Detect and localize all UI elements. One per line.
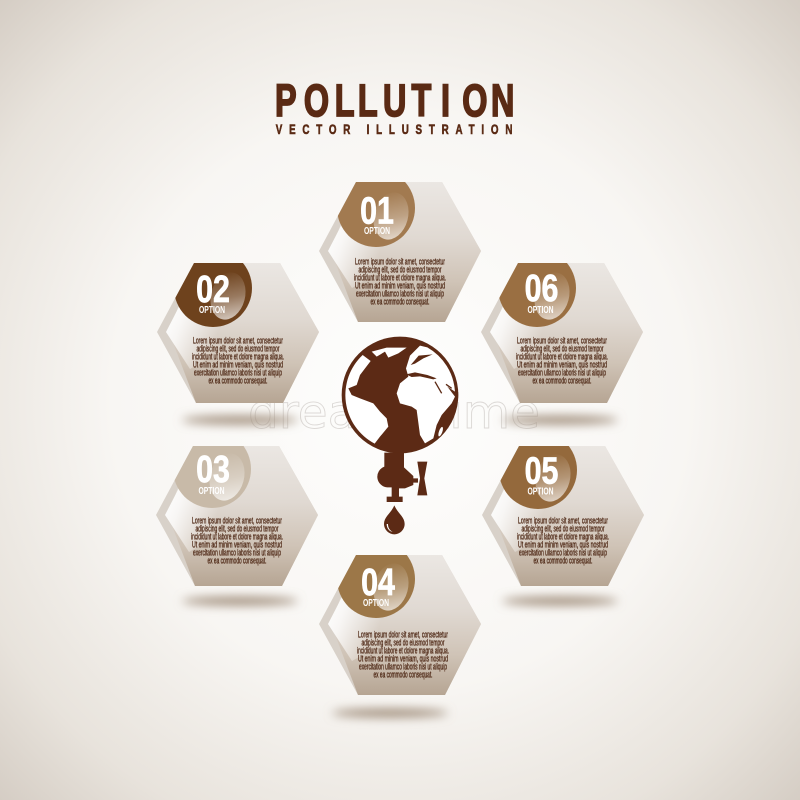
body text: incididunt ut labore et dolore magna aliqua. bbox=[516, 352, 608, 362]
water drop bbox=[384, 505, 405, 534]
body text: incididunt ut labore et dolore magna aliqua. bbox=[354, 272, 446, 282]
shadow: panel 02 bbox=[182, 416, 298, 424]
panel: option 06 bbox=[481, 249, 643, 403]
body text: ex ea commodo consequat. bbox=[532, 376, 592, 386]
body text: adipiscing elit, sed do eiusmod tempor bbox=[362, 638, 444, 648]
body text bbox=[354, 256, 446, 306]
label: OPTION bbox=[528, 486, 554, 498]
label: OPTION bbox=[528, 305, 554, 316]
panel: option 02 bbox=[157, 249, 319, 403]
body text: exercitation ullamco laboris nisi ut aliquip bbox=[356, 288, 444, 298]
body text: ex ea commodo consequat. bbox=[208, 376, 268, 386]
body text: exercitation ullamco laboris nisi ut aliquip bbox=[193, 548, 281, 558]
number 05: 05 bbox=[525, 450, 558, 492]
body text: Lorem ipsum dolor sit amet, consectetur bbox=[192, 516, 282, 526]
body text: Ut enim ad minim veniam, quis nostrud bbox=[358, 654, 448, 664]
number 06: 06 bbox=[525, 268, 558, 310]
body text: adipiscing elit, sed do eiusmod tempor bbox=[196, 524, 278, 534]
body text bbox=[516, 336, 608, 386]
shadow: panel 03 bbox=[182, 596, 298, 606]
body text: ex ea commodo consequat. bbox=[534, 556, 592, 566]
body text: Lorem ipsum dolor sit amet, consectetur bbox=[518, 516, 608, 526]
body text: Lorem ipsum dolor sit amet, consectetur bbox=[517, 336, 607, 346]
body text: exercitation ullamco laboris nisi ut aliquip bbox=[194, 368, 282, 378]
body text: ex ea commodo consequat. bbox=[374, 670, 432, 680]
body text: Ut enim ad minim veniam, quis nostrud bbox=[355, 280, 445, 290]
body text: Ut enim ad minim veniam, quis nostrud bbox=[518, 540, 608, 550]
number 04: 04 bbox=[361, 562, 395, 604]
label: OPTION bbox=[199, 305, 225, 316]
icon: globe faucet with drop bbox=[342, 337, 458, 534]
panel: option 05 bbox=[482, 431, 644, 586]
body text: Lorem ipsum dolor sit amet, consectetur bbox=[355, 256, 445, 266]
body text: exercitation ullamco laboris nisi ut aliquip bbox=[359, 662, 447, 672]
body text: ex ea commodo consequat. bbox=[370, 296, 430, 306]
label: OPTION bbox=[363, 598, 389, 609]
faucet bbox=[377, 453, 427, 502]
body text: Lorem ipsum dolor sit amet, consectetur bbox=[358, 630, 448, 640]
body text: adipiscing elit, sed do eiusmod tempor bbox=[522, 524, 604, 534]
label: OPTION bbox=[198, 486, 224, 497]
body text: Ut enim ad minim veniam, quis nostrud bbox=[192, 540, 282, 550]
body text: adipiscing elit, sed do eiusmod tempor bbox=[520, 344, 604, 354]
number 03: 03 bbox=[196, 449, 230, 491]
body text bbox=[192, 336, 284, 386]
body text: adipiscing elit, sed do eiusmod tempor bbox=[196, 344, 280, 354]
panel: option 04 bbox=[319, 540, 481, 695]
body text: adipiscing elit, sed do eiusmod tempor bbox=[358, 264, 442, 274]
body text: incididunt ut labore et dolore magna aliqua. bbox=[192, 352, 284, 362]
number 02: 02 bbox=[196, 269, 230, 311]
panel: option 01 bbox=[319, 169, 481, 322]
watermark: dreamstime bbox=[248, 385, 540, 439]
shadow: panel 06 bbox=[502, 416, 618, 424]
body text: incididunt ut labore et dolore magna aliqua. bbox=[191, 532, 283, 542]
body text: Ut enim ad minim veniam, quis nostrud bbox=[193, 360, 283, 370]
body text: incididunt ut labore et dolore magna aliqua. bbox=[517, 532, 609, 542]
number 01: 01 bbox=[360, 190, 394, 232]
title: POLLUTION bbox=[275, 77, 514, 126]
body text: incididunt ut labore et dolore magna aliqua. bbox=[357, 646, 449, 656]
subtitle: VECTOR ILLUSTRATION bbox=[276, 121, 512, 137]
body text: Lorem ipsum dolor sit amet, consectetur bbox=[193, 336, 283, 346]
label: OPTION bbox=[364, 226, 390, 237]
body text: exercitation ullamco laboris nisi ut aliquip bbox=[519, 548, 607, 558]
body text bbox=[517, 516, 609, 566]
body text: exercitation ullamco laboris nisi ut aliquip bbox=[518, 368, 606, 378]
shadow: panel 05 bbox=[502, 596, 618, 606]
panel: option 03 bbox=[156, 446, 318, 586]
body text: ex ea commodo consequat. bbox=[208, 556, 266, 566]
globe bbox=[342, 337, 458, 453]
body text bbox=[357, 630, 449, 680]
body text bbox=[191, 516, 283, 566]
body text: Ut enim ad minim veniam, quis nostrud bbox=[517, 360, 607, 370]
shadow: panel 04 bbox=[332, 708, 448, 718]
